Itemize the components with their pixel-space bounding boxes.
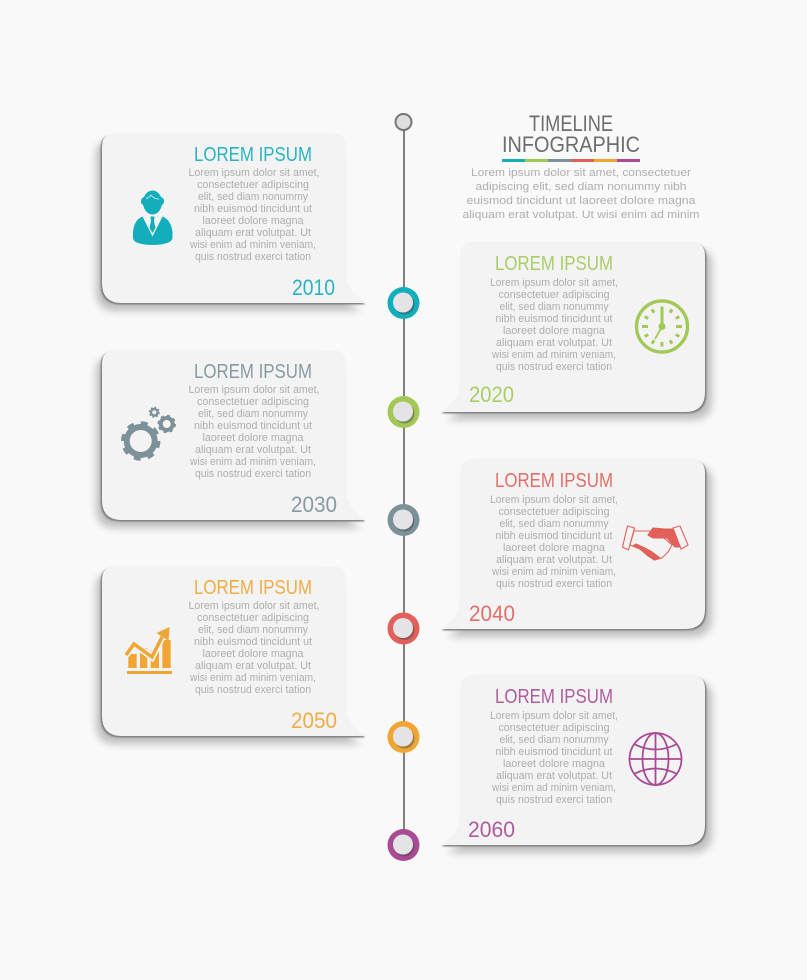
- intro text: [462, 167, 700, 221]
- body text: consectetuer adipiscing: [498, 289, 610, 301]
- body text: [188, 167, 320, 263]
- body text: Lorem ipsum dolor sit amet,: [490, 494, 618, 506]
- heading: 2030: LOREM IPSUM: [194, 360, 312, 383]
- year: 2060: 2060: [468, 817, 515, 842]
- icon: gears: [123, 408, 175, 458]
- body text: laoreet dolore magna: [202, 648, 304, 660]
- title second line: INFOGRAPHIC: [502, 132, 640, 157]
- heading: [462, 111, 700, 221]
- body text: aliquam erat volutpat. Ut: [195, 660, 311, 672]
- body text: Lorem ipsum dolor sit amet,: [490, 710, 618, 722]
- body text: nibh euismod tincidunt ut: [194, 203, 312, 215]
- body text: [188, 600, 320, 696]
- body text: elit, sed diam nonummy: [198, 408, 308, 420]
- body text: Lorem ipsum dolor sit amet,: [188, 384, 320, 396]
- body text: nibh euismod tincidunt ut: [496, 313, 612, 325]
- title: TIMELINE: [529, 111, 613, 136]
- body text: aliquam erat volutpat. Ut: [195, 227, 311, 239]
- body text: [490, 710, 618, 806]
- body text: wisi enim ad minim veniam,: [491, 349, 616, 361]
- intro text: aliquam erat volutpat. Ut wisi enim ad minim: [462, 209, 700, 221]
- body text: consectetuer adipiscing: [197, 179, 309, 191]
- node: 2060: [388, 829, 420, 861]
- panel: 2050: [96, 566, 367, 744]
- body text: consectetuer adipiscing: [197, 612, 309, 624]
- body text: [490, 494, 618, 590]
- node: 2020: [388, 396, 420, 428]
- body text: [188, 384, 320, 480]
- body text: elit, sed diam nonummy: [500, 301, 609, 313]
- body text: quis nostrud exerci tation: [496, 578, 612, 590]
- multicolour underline: [502, 159, 640, 162]
- body text: laoreet dolore magna: [202, 432, 304, 444]
- heading: 2020: LOREM IPSUM: [495, 252, 613, 275]
- body text: elit, sed diam nonummy: [198, 191, 308, 203]
- body text: Lorem ipsum dolor sit amet,: [490, 277, 618, 289]
- year: 2010: 2010: [292, 275, 335, 300]
- intro text: euismod tincidunt ut laoreet dolore magna: [466, 195, 696, 207]
- body text: Lorem ipsum dolor sit amet,: [188, 167, 320, 179]
- body text: laoreet dolore magna: [503, 758, 606, 770]
- body text: wisi enim ad minim veniam,: [189, 239, 316, 251]
- body text: wisi enim ad minim veniam,: [491, 782, 616, 794]
- body text: aliquam erat volutpat. Ut: [496, 770, 612, 782]
- body text: [490, 277, 618, 373]
- body text: quis nostrud exerci tation: [195, 251, 311, 263]
- heading: 2010: LOREM IPSUM: [194, 143, 312, 166]
- body text: elit, sed diam nonummy: [500, 734, 609, 746]
- body text: elit, sed diam nonummy: [198, 624, 308, 636]
- body text: laoreet dolore magna: [503, 325, 606, 337]
- body text: quis nostrud exerci tation: [496, 361, 612, 373]
- panel: 2010: [96, 133, 367, 311]
- icon: growth chart: [126, 627, 172, 674]
- panel: 2040: [440, 459, 712, 637]
- node: 2050: [388, 721, 420, 753]
- body text: aliquam erat volutpat. Ut: [496, 337, 612, 349]
- body text: quis nostrud exerci tation: [195, 684, 311, 696]
- body text: elit, sed diam nonummy: [500, 518, 609, 530]
- panel: 2020: [440, 242, 712, 420]
- body text: laoreet dolore magna: [202, 215, 304, 227]
- year: 2030: 2030: [291, 492, 337, 517]
- body text: nibh euismod tincidunt ut: [496, 530, 612, 542]
- intro text: adipiscing elit, sed diam nonummy nibh: [476, 181, 686, 193]
- body text: quis nostrud exerci tation: [496, 794, 612, 806]
- body text: wisi enim ad minim veniam,: [189, 672, 316, 684]
- year: 2020: 2020: [469, 382, 514, 407]
- node: 2040: [388, 612, 420, 644]
- timeline axis: [403, 122, 405, 845]
- icon: handshake: [622, 526, 688, 560]
- body text: Lorem ipsum dolor sit amet,: [188, 600, 320, 612]
- body text: nibh euismod tincidunt ut: [194, 636, 312, 648]
- intro text: Lorem ipsum dolor sit amet, consectetuer: [471, 167, 691, 179]
- heading: 2050: LOREM IPSUM: [194, 576, 312, 599]
- body text: quis nostrud exerci tation: [195, 468, 311, 480]
- body text: laoreet dolore magna: [503, 542, 606, 554]
- body text: consectetuer adipiscing: [498, 722, 610, 734]
- heading: 2060: LOREM IPSUM: [495, 685, 613, 708]
- body text: wisi enim ad minim veniam,: [491, 566, 616, 578]
- panel: 2030: [96, 350, 367, 528]
- heading: 2040: LOREM IPSUM: [495, 469, 613, 492]
- node: 2010: [388, 287, 420, 319]
- body text: consectetuer adipiscing: [197, 396, 309, 408]
- body text: nibh euismod tincidunt ut: [496, 746, 612, 758]
- icon: clock: [636, 301, 688, 352]
- node: 2030: [388, 504, 420, 536]
- body text: aliquam erat volutpat. Ut: [496, 554, 612, 566]
- body text: nibh euismod tincidunt ut: [194, 420, 312, 432]
- icon: businessman: [133, 190, 172, 245]
- body text: aliquam erat volutpat. Ut: [195, 444, 311, 456]
- timeline start node: [396, 114, 412, 130]
- year: 2050: 2050: [291, 708, 337, 733]
- icon: globe: [630, 733, 682, 785]
- year: 2040: 2040: [469, 601, 515, 626]
- body text: consectetuer adipiscing: [498, 506, 610, 518]
- body text: wisi enim ad minim veniam,: [189, 456, 316, 468]
- panel: 2060: [440, 675, 712, 853]
